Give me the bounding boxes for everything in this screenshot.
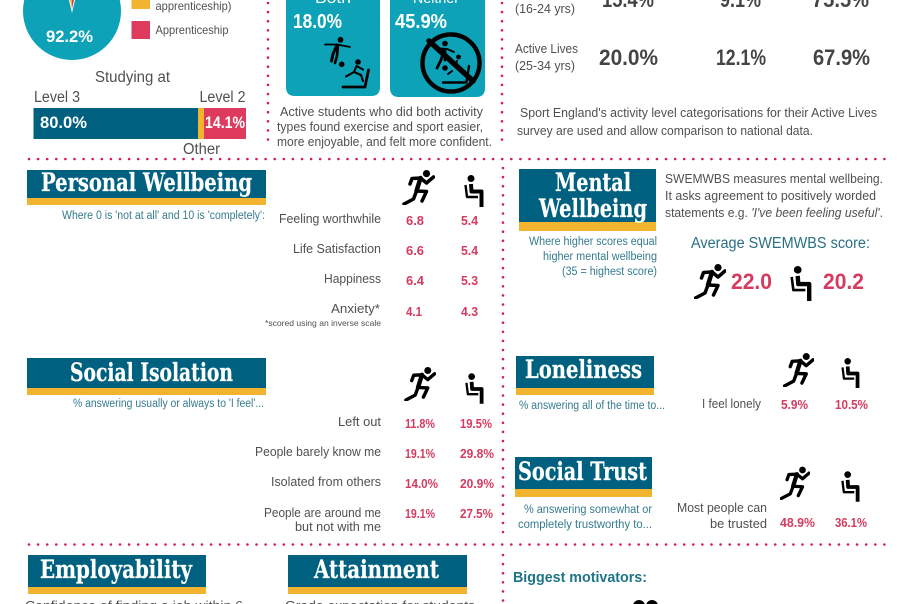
table: personal wellbeing scores: 6.8 [406, 213, 424, 228]
table: personal wellbeing scores: Happiness [324, 272, 381, 286]
panel: neither activity type: 45.9% [395, 11, 447, 33]
row: I feel lonely: 5.9% [781, 397, 808, 412]
icon: active runner [781, 467, 809, 498]
heading: Social Trust: Social Trust [518, 457, 647, 486]
row: most people can be trusted: 48.9% [780, 515, 815, 530]
table: personal wellbeing scores: 4.3 [461, 304, 478, 319]
table: social isolation: 19.1% [405, 446, 435, 461]
table: social isolation: Isolated from others [271, 475, 381, 489]
table: personal wellbeing scores [265, 212, 479, 328]
heading: Attainment [288, 555, 467, 594]
table: activity levels: (16-24 yrs) [515, 2, 575, 16]
table: social isolation: Left out [338, 415, 382, 429]
text: loneliness note: % answering all of the time to... [519, 400, 665, 412]
icon: prohibited sport [422, 34, 480, 92]
table: personal wellbeing scores: Life Satisfaction [293, 242, 381, 256]
heading: Personal Wellbeing [27, 168, 266, 205]
table: activity levels: 67.9% [813, 45, 870, 70]
heading: Loneliness: Loneliness [525, 355, 642, 384]
pie legend: Apprenticeship [156, 23, 229, 37]
icon: active runner [406, 367, 435, 400]
table: personal wellbeing scores: 4.1 [406, 304, 422, 319]
icon: footballer and treadmill runner [325, 37, 368, 87]
text: SWEMWBS description: It asks agreement to positively worded [665, 189, 876, 203]
table: social isolation: 20.9% [460, 476, 494, 491]
text: social isolation note: % answering usually or always to 'I feel'... [73, 398, 264, 410]
icon: active runner [404, 170, 434, 204]
table: social isolation: 19.1% [405, 506, 435, 521]
table: personal wellbeing scores: 5.4 [461, 243, 479, 258]
heading: Mental Wellbeing: Mental [555, 168, 631, 197]
table: activity levels: 20.0% [599, 45, 658, 70]
row: most people can be trusted: Most people can [677, 501, 767, 515]
text: active students caption: Active students who did both activity [280, 105, 484, 119]
row: most people can be trusted [677, 501, 867, 531]
row: most people can be trusted: 36.1% [835, 515, 867, 530]
pie legend [132, 0, 232, 39]
table: activity levels: 12.1% [716, 45, 766, 70]
text: Sport England note: Sport England's activity level categorisations for their Active Lives [520, 106, 877, 120]
text: SWEMWBS scale note: (35 = highest score) [562, 266, 657, 278]
heading: Mental Wellbeing: Wellbeing [538, 194, 647, 223]
table: personal wellbeing scores: 6.6 [406, 243, 424, 258]
text: active students caption [277, 105, 492, 149]
pie chart: study type: 92.2% [46, 28, 93, 46]
table: activity levels: (25-34 yrs) [515, 59, 575, 73]
text: social trust note: completely trustworthy to... [518, 519, 652, 531]
row: I feel lonely: I feel lonely [702, 397, 762, 411]
stacked bar: studying at: 80.0% [40, 113, 87, 132]
text: social trust note: % answering somewhat or [524, 504, 652, 516]
table: social isolation: 14.0% [405, 476, 438, 491]
row: I feel lonely [702, 397, 868, 412]
stacked bar: studying at: 14.1% [205, 113, 245, 132]
table: personal wellbeing scores: 5.3 [461, 273, 478, 288]
SWEMWBS scores with icons [696, 264, 864, 301]
text: SWEMWBS description [665, 172, 883, 220]
table: social isolation: People barely know me [255, 445, 381, 459]
text: SWEMWBS scale note: higher mental wellbeing [543, 251, 657, 263]
text: active students caption: types found exercise and sport easier, [277, 120, 483, 134]
heading: Social Trust [515, 457, 652, 497]
heading: Loneliness [516, 355, 654, 395]
table: personal wellbeing scores: Anxiety* [331, 302, 380, 316]
heading: Employability [28, 555, 206, 594]
table: social isolation: 27.5% [460, 506, 493, 521]
stacked bar: studying at: Other [183, 141, 220, 158]
icon: motivators cut-off [633, 600, 658, 604]
stacked bar: studying at [34, 69, 246, 158]
text: SWEMWBS scale note [529, 236, 657, 278]
icon: inactive seated [842, 471, 858, 502]
row: most people can be trusted: be trusted [710, 517, 767, 531]
table: activity levels [515, 0, 870, 73]
stacked bar: studying at: Studying at [95, 69, 171, 86]
heading: Social Isolation: Social Isolation [70, 358, 233, 387]
table: activity levels: Active Lives [515, 42, 578, 56]
stacked bar: studying at: Level 2 [200, 89, 246, 106]
table: personal wellbeing scores: 6.4 [406, 273, 425, 288]
heading: Employability: Employability [40, 555, 193, 584]
icon: active runner [784, 353, 813, 386]
heading: Attainment: Attainment [313, 555, 439, 584]
icon: inactive seated [466, 175, 482, 207]
table: social isolation: 29.8% [460, 446, 494, 461]
text: SWEMWBS description: statements e.g. 'I've been feeling useful'. [665, 206, 883, 220]
pie chart: study type [23, 0, 121, 60]
table: social isolation [255, 415, 494, 534]
table: personal wellbeing scores: Feeling worthwhile [279, 212, 381, 226]
icon: inactive seated [466, 373, 482, 404]
text: Sport England note: survey are used and allow comparison to national data. [517, 124, 813, 138]
panel: both activity types [286, 0, 380, 96]
table: personal wellbeing scores: *scored using an inverse scale [265, 318, 381, 328]
row: I feel lonely: 10.5% [835, 397, 868, 412]
heading: Biggest motivators: Biggest motivators: [513, 569, 647, 586]
stacked bar: studying at: Level 3 [34, 89, 80, 106]
panel: both activity types: 18.0% [293, 11, 342, 33]
text: SWEMWBS description: SWEMWBS measures mental wellbeing. [665, 172, 883, 186]
table: social isolation: 11.8% [405, 416, 435, 431]
table: social isolation: People are around me [264, 506, 381, 520]
text: wellbeing scale note: Where 0 is 'not at all' and 10 is 'completely': [62, 210, 265, 222]
table: social isolation: but not with me [295, 520, 381, 534]
text: social trust note [518, 504, 652, 531]
heading: Personal Wellbeing: Personal Wellbeing [41, 168, 252, 197]
panel: neither activity type [390, 0, 485, 97]
SWEMWBS scores with icons: 22.0 [731, 269, 772, 294]
table: social isolation: 19.5% [460, 416, 492, 431]
heading: Mental Wellbeing [519, 168, 656, 231]
SWEMWBS scores with icons: 20.2 [823, 269, 864, 294]
icon: inactive seated [843, 358, 858, 388]
text: SWEMWBS scale note: Where higher scores equal [529, 236, 657, 248]
text: active students caption: more enjoyable, and felt more confident. [277, 135, 492, 149]
heading: Social Isolation [27, 358, 266, 395]
text: Sport England note [517, 106, 877, 138]
table: personal wellbeing scores: 5.4 [461, 213, 479, 228]
text: average SWEMWBS heading: Average SWEMWBS score: [691, 235, 870, 252]
